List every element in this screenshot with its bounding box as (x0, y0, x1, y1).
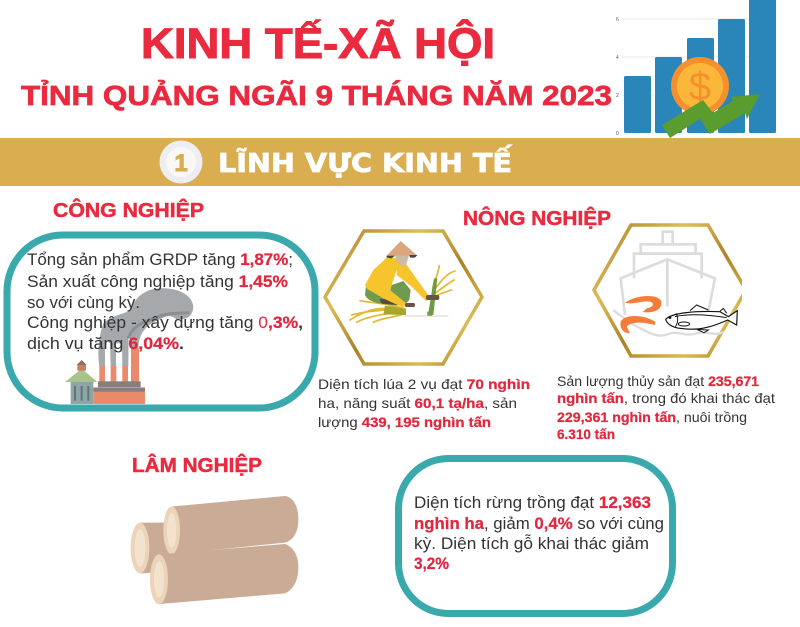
text: công nghiệp figures: Công nghiệp - xây dựng tăng 0,3%, (27, 314, 303, 332)
text: rice figures: Diện tích lúa 2 vụ đạt 70 nghìn (318, 376, 530, 392)
icon: bar chart with coin and rising arrow: 2 (616, 93, 619, 99)
icon: shrimp and fish (613, 296, 737, 336)
icon: bar chart with coin and rising arrow: 6 (616, 17, 619, 23)
panel: forestry figures (398, 458, 672, 614)
teal rounded frame (7, 235, 315, 408)
title: TỈNH QUẢNG NGÃI 9 THÁNG NĂM 2023 (21, 79, 612, 111)
text: rice figures: lượng 439, 195 nghìn tấn (318, 414, 491, 430)
text: công nghiệp figures: so với cùng kỳ. (27, 294, 140, 312)
heading: lâm nghiệp: LÂM NGHIỆP (132, 453, 262, 477)
text: fisheries figures: 229,361 nghìn tấn, nuôi trồng (557, 409, 747, 425)
panel: lâm nghiệp (131, 453, 298, 604)
text: công nghiệp figures: Tổng sản phẩm GRDP tăng 1,87%; (27, 251, 293, 269)
heading: nông nghiệp: NÔNG NGHIỆP (463, 206, 611, 230)
icon: bar chart with coin and rising arrow: $ (689, 65, 711, 109)
icon: factory with smoke (65, 288, 193, 404)
number badge: 1 (174, 150, 188, 177)
text: fisheries figures (557, 373, 775, 442)
gold hexagon frame (594, 225, 746, 356)
title: KINH TẾ-XÃ HỘI (141, 19, 495, 68)
text: forestry figures: 3,2% (414, 555, 449, 573)
text: fisheries figures: nghìn tấn , trong đó khai thác đạt (557, 390, 775, 406)
gold hexagon frame (325, 231, 482, 364)
panel: fisheries (557, 225, 775, 442)
title (21, 19, 612, 111)
icon: bar chart with coin and rising arrow: 0 (616, 131, 619, 137)
text: fisheries figures: Sản lượng thủy sản đạt 235,671 (557, 373, 759, 389)
icon: stacked logs (131, 496, 298, 604)
section banner (0, 138, 800, 186)
text: forestry figures: nghìn ha, giảm 0,4% so với cùng (414, 515, 664, 533)
text: công nghiệp figures: Sản xuất công nghiệp tăng 1,45% (27, 273, 288, 291)
icon: rice farmer (350, 241, 455, 322)
section heading: LĨNH VỰC KINH TẾ (218, 144, 512, 179)
panel: rice farming (318, 231, 530, 430)
number badge (160, 140, 202, 184)
text: công nghiệp figures: dịch vụ tăng 6,04%. (27, 335, 184, 353)
text: rice figures (318, 376, 530, 430)
heading: công nghiệp: CÔNG NGHIỆP (53, 198, 204, 222)
icon: bar chart with coin and rising arrow: 4 (616, 55, 619, 61)
text: rice figures: ha, năng suất 60,1 tạ/ha , sản (318, 395, 517, 411)
teal rounded frame (398, 458, 672, 614)
panel: công nghiệp (7, 198, 315, 408)
text: công nghiệp figures (27, 251, 303, 353)
text: fisheries figures: 6.310 tấn (557, 426, 615, 442)
icon: ship outline (621, 232, 715, 320)
icon: bar chart with coin and rising arrow (616, 0, 776, 138)
text: forestry figures: kỳ. Diện tích gỗ khai thác giảm (414, 534, 649, 553)
text: forestry figures: Diện tích rừng trồng đạt 12,363 (414, 494, 651, 512)
text: forestry figures (414, 494, 664, 573)
